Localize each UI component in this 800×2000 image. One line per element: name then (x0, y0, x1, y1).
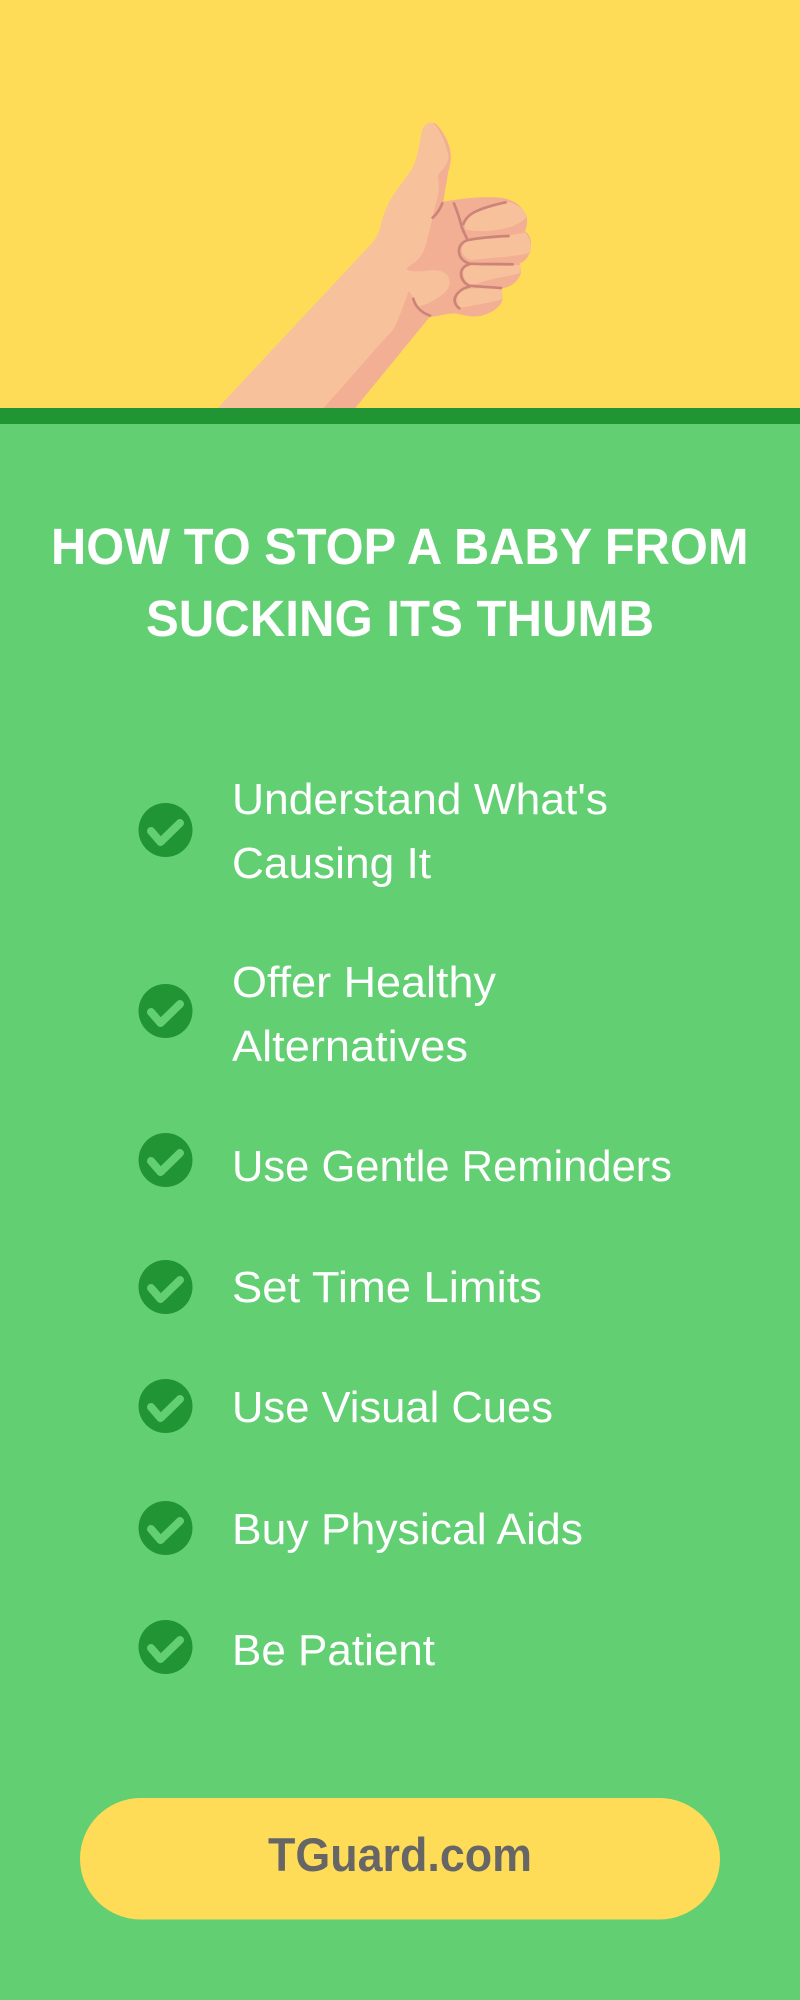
list item: Use Visual Cues (138, 1379, 553, 1433)
list item: Offer Healthy Alternatives: Alternatives (232, 1022, 468, 1071)
title (51, 518, 748, 647)
list item: Use Visual Cues: Use Visual Cues (232, 1383, 553, 1432)
list item: Be Patient: Be Patient (232, 1626, 435, 1675)
list item: Set Time Limits (138, 1260, 542, 1314)
list item: Understand What's Causing It: Causing It (232, 839, 431, 888)
list item: Offer Healthy Alternatives: Offer Healthy (232, 958, 496, 1007)
title: SUCKING ITS THUMB (146, 590, 654, 647)
list item: Use Gentle Reminders (138, 1133, 672, 1191)
list item: Be Patient (138, 1620, 435, 1675)
list item: Offer Healthy Alternatives (138, 958, 496, 1071)
finger 3 highlight (463, 265, 521, 285)
finger 2 highlight (462, 233, 531, 260)
panel: yellow header (0, 0, 800, 408)
icon: thumbs up hand (217, 123, 531, 408)
list item: Understand What's Causing It (138, 775, 608, 888)
call to action button: TGuard.com (268, 1828, 532, 1881)
list item: Set Time Limits: Set Time Limits (232, 1263, 542, 1312)
finger 4 highlight (457, 288, 503, 308)
panel: green body (0, 424, 800, 2000)
finger 1 highlight (465, 201, 527, 231)
list item: Understand What's Causing It: Understand What's (232, 775, 608, 824)
hand crease lines (413, 202, 513, 316)
title: HOW TO STOP A BABY FROM (51, 518, 748, 575)
list item: Use Gentle Reminders: Use Gentle Reminders (232, 1142, 672, 1191)
list item: Buy Physical Aids: Buy Physical Aids (232, 1505, 583, 1554)
call to action button (80, 1798, 720, 1920)
divider band (0, 408, 800, 424)
